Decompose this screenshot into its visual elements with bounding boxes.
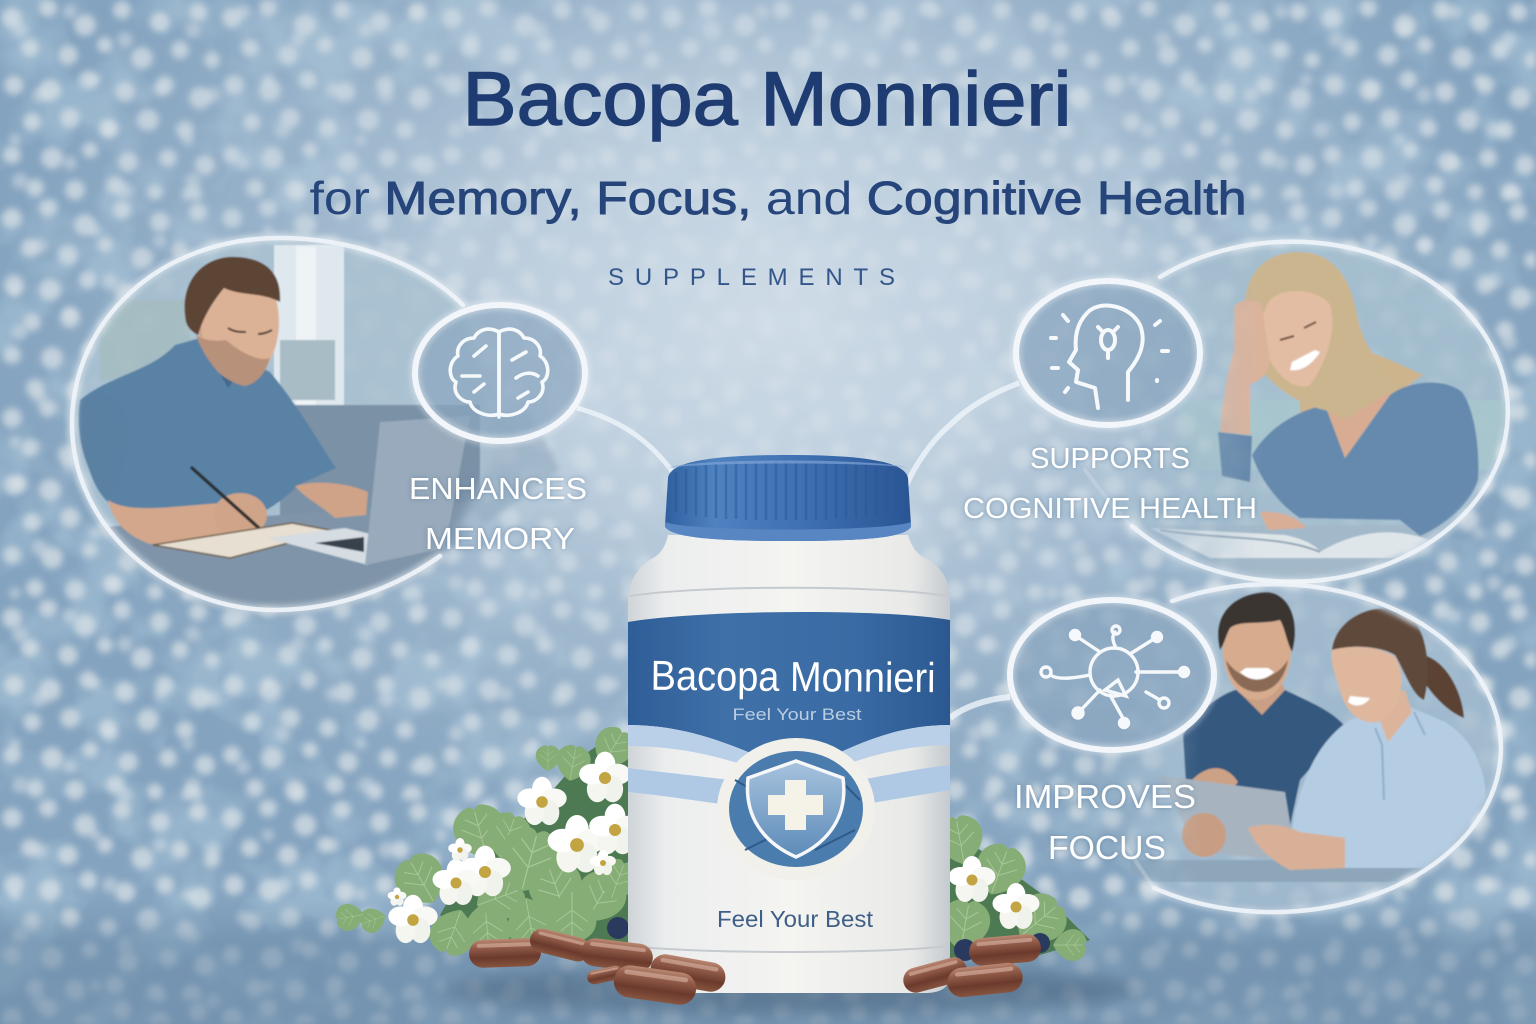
ring: left circle	[72, 238, 463, 610]
ring: right bottom circle	[1125, 584, 1501, 912]
subtitle: for Memory, Focus, and Cognitive Health	[310, 172, 1246, 224]
bottle cap	[665, 455, 911, 541]
icon: brain	[415, 305, 585, 441]
plants: leaves and white flowers	[334, 721, 1140, 1014]
title: Bacopa Monnieri	[462, 57, 1072, 142]
photo: woman reading	[1148, 246, 1504, 578]
connector arrow to bottle	[906, 383, 1019, 486]
label: enhances memory: ENHANCES	[409, 471, 587, 506]
label band	[628, 612, 950, 805]
label text: product name: Bacopa Monnieri	[650, 652, 936, 701]
connector arrow to bottle	[950, 697, 1010, 718]
panel: supports cognitive health	[906, 240, 1520, 595]
connector arrow to bottle	[577, 408, 674, 474]
label text: slogan: Feel Your Best	[732, 705, 862, 724]
bottle	[628, 455, 950, 993]
laptop lid extending past panel	[365, 412, 560, 565]
photo: couple with tablet	[1107, 589, 1496, 908]
capsules	[469, 926, 1042, 1007]
panel: enhances memory	[60, 230, 674, 620]
bottle body	[628, 535, 950, 993]
label: supports cognitive health: SUPPORTS	[1030, 443, 1190, 475]
label: supports cognitive health	[963, 443, 1257, 525]
label: supports cognitive health: COGNITIVE HEALTH	[963, 493, 1257, 525]
label text: bottom slogan: Feel Your Best	[717, 906, 874, 932]
photo: man writing at laptop	[75, 243, 490, 614]
tagline: supplements: SUPPLEMENTS	[608, 264, 900, 291]
label: improves focus	[1014, 778, 1196, 866]
icon: neural network	[1010, 600, 1214, 750]
label: enhances memory	[409, 471, 587, 556]
label: improves focus: IMPROVES	[1014, 778, 1196, 815]
panel: improves focus	[950, 580, 1510, 920]
icon: head with lightbulb	[1016, 281, 1200, 425]
icon: shield with cross	[717, 738, 875, 880]
label: enhances memory: MEMORY	[425, 521, 575, 556]
label: improves focus: FOCUS	[1048, 829, 1166, 866]
ring: right top circle	[1085, 242, 1508, 582]
dark foliage mass	[440, 735, 632, 950]
